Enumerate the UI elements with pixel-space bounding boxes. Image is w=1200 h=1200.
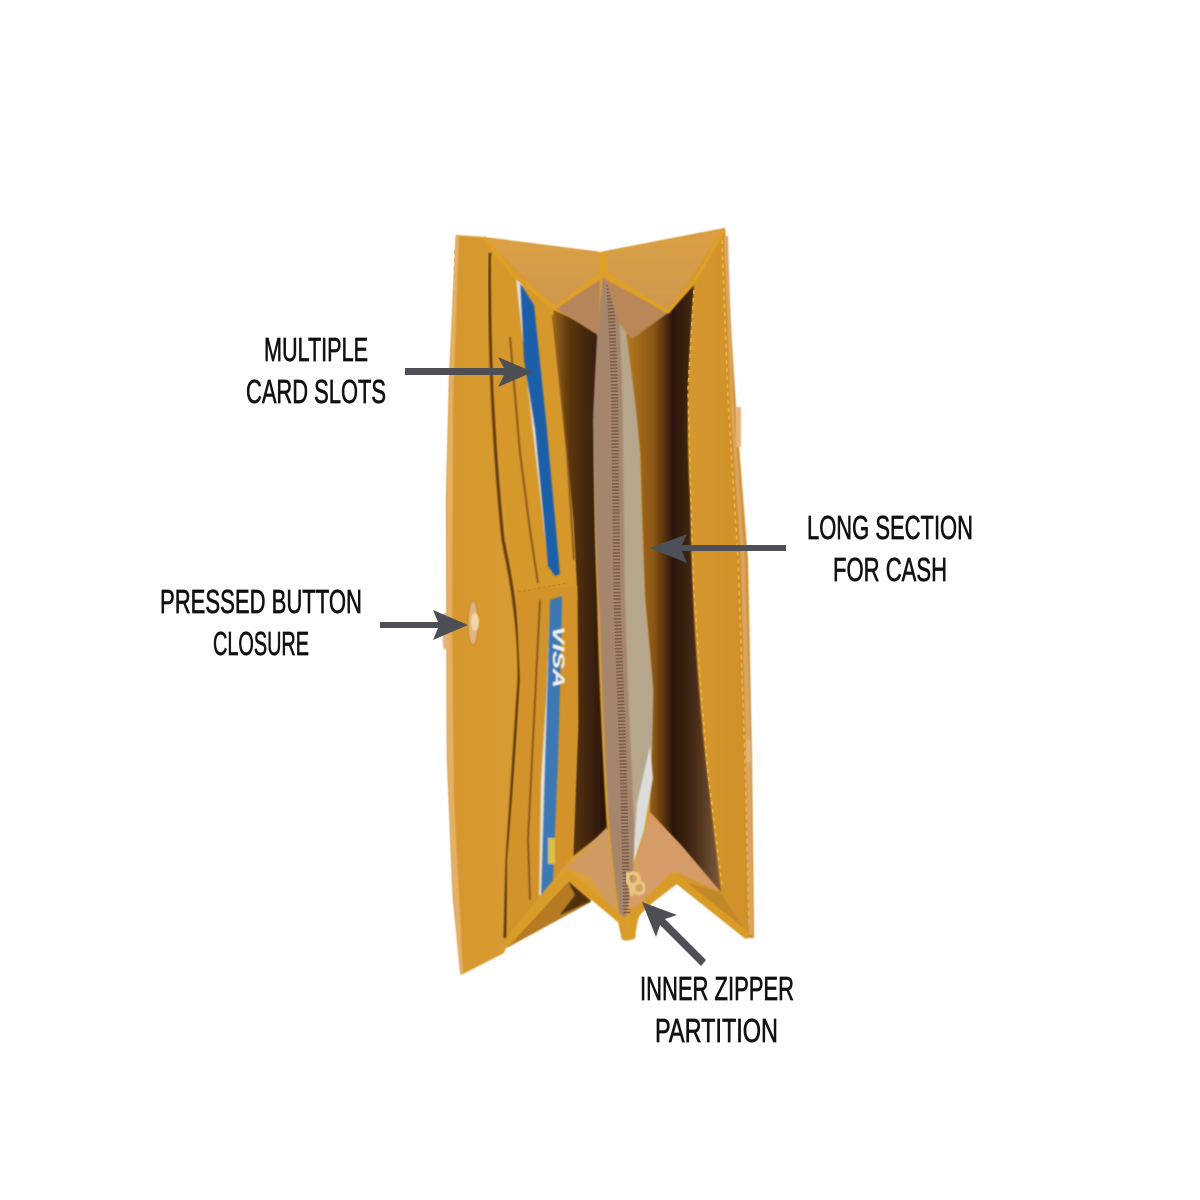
flap shadow <box>560 881 591 915</box>
label: long section for cash <box>807 509 973 588</box>
side tabs <box>442 407 751 762</box>
label: long section for cash: FOR CASH <box>833 551 947 588</box>
label: multiple card slots: MULTIPLE <box>264 331 368 368</box>
bottom left gusset flap <box>506 882 591 948</box>
receipt <box>633 746 653 865</box>
label: long section for cash: LONG SECTION <box>807 509 973 546</box>
zipper teeth <box>610 285 627 915</box>
label: multiple card slots: CARD SLOTS <box>246 373 386 410</box>
left slit shadow <box>490 253 519 938</box>
top right gusset <box>604 229 724 312</box>
arrow: multiple card slots <box>405 357 533 387</box>
label: pressed button closure: PRESSED BUTTON <box>160 583 362 620</box>
label: multiple card slots <box>246 331 386 410</box>
VISA logo text: VISA <box>549 626 568 688</box>
zipper tape <box>593 277 634 918</box>
upper card pocket <box>491 255 577 600</box>
lining beige <box>617 300 653 865</box>
label: inner zipper partition: INNER ZIPPER <box>640 970 794 1007</box>
right interior dark <box>625 285 721 892</box>
label: pressed button closure <box>160 583 362 662</box>
label: inner zipper partition: PARTITION <box>655 1012 778 1049</box>
wallet photo <box>442 228 754 975</box>
arrow: long section for cash <box>650 534 786 563</box>
top left gusset <box>484 238 602 308</box>
label: pressed button closure: CLOSURE <box>213 625 309 662</box>
bottom right flap <box>677 880 749 937</box>
bottom left peach lining <box>567 827 617 917</box>
lower blue VISA card <box>539 596 568 896</box>
bottom gusset yellow edge <box>506 875 748 944</box>
top gusset yellow edges <box>484 230 724 312</box>
panel stitching <box>450 240 749 960</box>
upper blue card <box>516 279 560 576</box>
left edge peach stripe <box>447 236 463 974</box>
pocket slit lines <box>510 315 574 900</box>
pocket stitch <box>518 583 568 592</box>
press button <box>468 601 479 645</box>
lower card pocket <box>507 586 578 937</box>
label: inner zipper partition <box>640 970 794 1049</box>
left interior dark <box>553 310 607 856</box>
bottom right peach lining <box>628 813 720 910</box>
right edge peach stripe <box>724 236 753 935</box>
top left gusset lower <box>555 280 600 336</box>
arrow: pressed button closure <box>380 610 468 640</box>
wallet outer body <box>446 228 754 975</box>
zipper pull <box>627 872 644 896</box>
arrow: inner zipper partition <box>642 902 706 966</box>
top right gusset lower <box>606 280 668 339</box>
